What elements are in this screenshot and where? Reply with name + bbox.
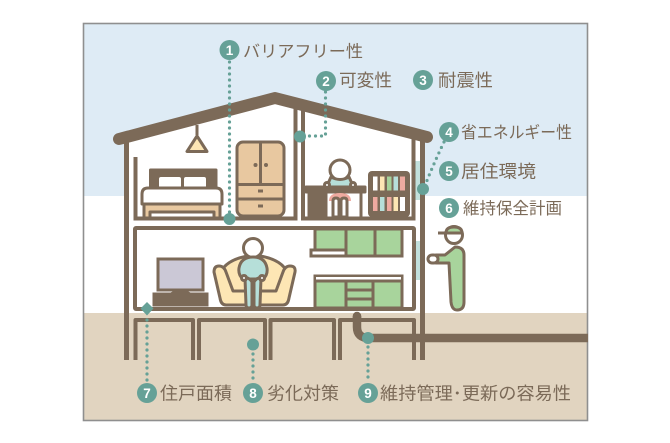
worker [428,226,464,310]
label 9: ease of maintenance and renewal: 9 [364,386,372,401]
label 8: deterioration countermeasures: 劣化対策 [267,384,339,404]
label 9: ease of maintenance and renewal: 維持管理･更新の容易性 [380,384,571,404]
roof [119,98,427,139]
foundation [136,320,414,360]
pipe [357,316,588,338]
label 2: adaptability [316,70,392,91]
label 4: energy saving: 省エネルギー性 [461,123,572,142]
label 6: maintenance plan: 6 [445,201,453,216]
wall insulation [415,161,420,280]
label 1: barrier free [220,40,363,61]
label 5: living environment: 5 [445,164,453,179]
marker dots [140,130,429,350]
label 1: barrier free: バリアフリー性 [243,42,363,61]
outer walls [126,135,422,360]
pendant lamp [187,125,207,152]
label 7: floor area: 7 [143,386,151,401]
label 3: earthquake resistance: 耐震性 [438,70,493,90]
label 7: floor area: 住戸面積 [160,384,232,404]
leader lines [147,62,444,383]
lower floor room [135,228,414,309]
label 8: deterioration countermeasures: 8 [249,386,257,401]
label 2: adaptability: 2 [322,74,330,89]
wardrobe [237,142,284,216]
bed [142,170,222,218]
label 1: barrier free: 1 [226,43,234,58]
television [154,259,207,305]
label 5: living environment: 居住環境 [461,162,536,182]
house structure [119,98,588,360]
desk and person [306,160,365,218]
upper floor rooms [136,106,414,218]
background scene [83,23,588,421]
label 2: adaptability: 可変性 [339,70,392,90]
label 6: maintenance plan: 維持保全計画 [463,199,562,218]
label 3: earthquake resistance [413,70,493,90]
label 3: earthquake resistance: 3 [419,73,427,88]
label 4: energy saving: 4 [445,125,453,140]
sofa and seated person [214,238,295,308]
kitchen [311,229,402,308]
house interior [126,100,422,313]
bookshelf [368,171,410,217]
